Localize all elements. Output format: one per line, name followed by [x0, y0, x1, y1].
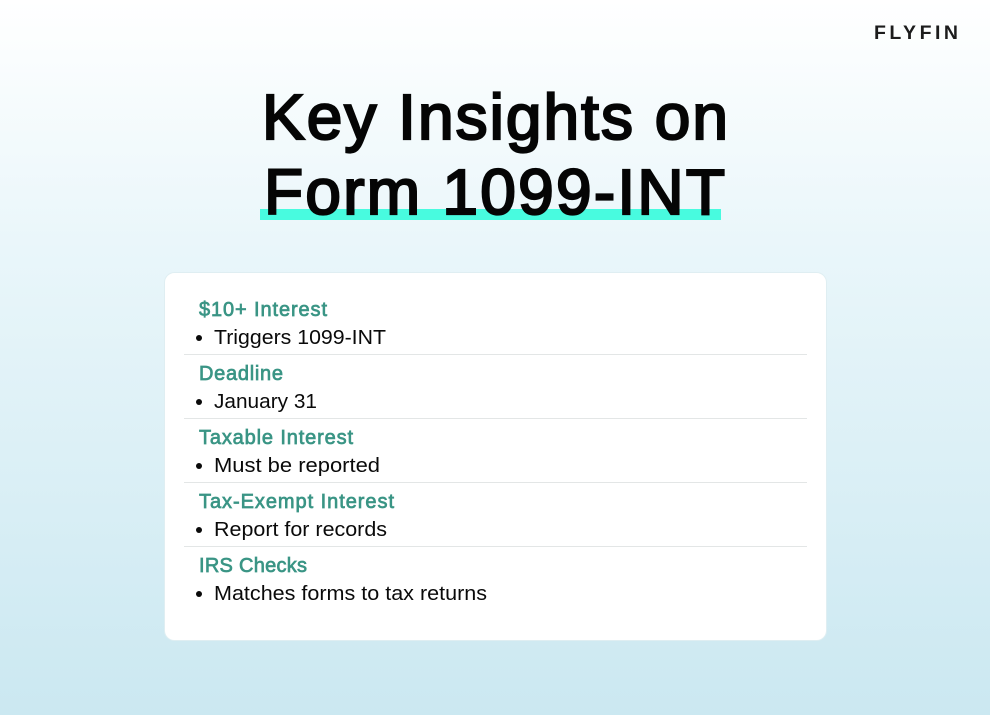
row: IRS Checks [196, 555, 487, 605]
row: Tax-Exempt Interest [196, 491, 394, 541]
row: Taxable Interest [196, 427, 380, 477]
card background [164, 272, 826, 640]
title line 2: Form 1099-INT [264, 156, 725, 228]
row: Tax-Exempt Interest: Tax-Exempt Interest [199, 491, 394, 513]
logo: FLYFIN: FLYFIN [874, 22, 958, 44]
title highlight underline [260, 209, 721, 220]
row: $10+ Interest: $10+ Interest [199, 299, 327, 321]
row: $10+ Interest: Triggers 1099-INT [214, 327, 386, 349]
panel: insights card [164, 272, 826, 640]
row: IRS Checks: Matches forms to tax returns [214, 583, 487, 605]
row: IRS Checks: IRS Checks [199, 555, 307, 577]
row: Taxable Interest: Must be reported [214, 455, 380, 477]
row: Deadline [196, 363, 317, 413]
title line 1: Key Insights on [262, 81, 728, 153]
row: Deadline: January 31 [214, 391, 317, 413]
row: $10+ Interest [196, 299, 386, 349]
row: Taxable Interest: Taxable Interest [199, 427, 353, 449]
row: Deadline: Deadline [199, 363, 283, 385]
title [260, 81, 728, 228]
row: Tax-Exempt Interest: Report for records [214, 519, 387, 541]
